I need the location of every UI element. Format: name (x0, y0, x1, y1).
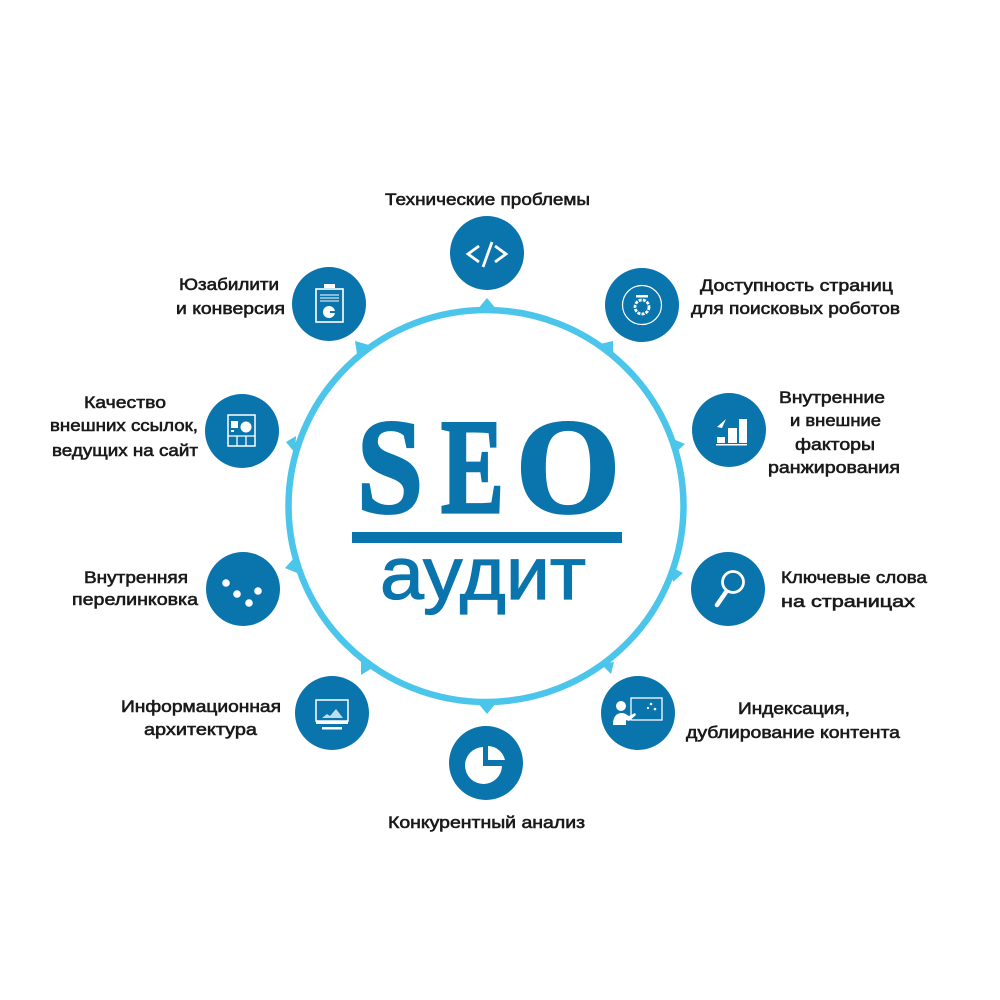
label: indexing: Индексация, (738, 699, 850, 718)
label: ranking factors: ранжирования (768, 458, 900, 477)
title divider bar (352, 532, 622, 543)
label: page accessibility: Доступность страниц (700, 276, 893, 295)
central title: SEO (357, 393, 620, 542)
node: usability and conversion (292, 267, 366, 341)
label: information architecture: архитектура (144, 720, 258, 739)
icon: code brackets (468, 242, 506, 267)
icon: dashboard grid (228, 415, 255, 446)
central title: SEO: E (441, 393, 504, 542)
central subtitle: аудит: аудит (380, 532, 586, 615)
label: internal linking (72, 568, 199, 609)
label: keywords: на страницах (781, 592, 916, 611)
node: internal linking (206, 552, 280, 626)
label: competitor analysis: Конкурентный анализ (388, 813, 585, 832)
icon: pie chart (465, 746, 505, 784)
label: backlink quality: Качество (84, 393, 166, 412)
node: ranking factors (692, 393, 766, 467)
node: keywords (691, 552, 765, 626)
node: page accessibility (605, 268, 679, 342)
icon: clipboard with chart (316, 284, 343, 322)
icon: monitor (316, 700, 348, 730)
node: technical problems (450, 216, 524, 290)
label: usability and conversion: и конверсия (176, 299, 285, 318)
label: page accessibility (691, 276, 900, 318)
node: backlink quality (205, 394, 279, 468)
label: ranking factors (768, 388, 900, 477)
label: keywords: Ключевые слова (781, 568, 928, 587)
icon: bar chart (716, 419, 747, 446)
label: information architecture (121, 697, 281, 739)
node: competitor analysis (449, 726, 523, 800)
central title: SEO: O (516, 393, 620, 542)
label: information architecture: Информационная (121, 697, 281, 716)
icon: gear in circle (622, 286, 662, 324)
icon: presenter at board (613, 698, 662, 725)
node: information architecture (295, 676, 369, 750)
label: technical problems: Технические проблемы (385, 190, 590, 209)
icon: linked dots (222, 579, 262, 607)
label: keywords (781, 568, 928, 611)
label: backlink quality: ведущих на сайт (52, 441, 198, 460)
label: usability and conversion: Юзабилити (179, 275, 279, 294)
node: indexing (601, 676, 675, 750)
label: internal linking: перелинковка (72, 590, 199, 609)
label: internal linking: Внутренняя (84, 568, 188, 587)
label: backlink quality (50, 393, 198, 460)
label: ranking factors: Внутренние (779, 388, 885, 407)
label: indexing (686, 699, 901, 742)
icon: magnifier (717, 572, 744, 605)
label: page accessibility: для поисковых роботов (691, 299, 900, 318)
label: ranking factors: факторы (795, 435, 875, 454)
label: backlink quality: внешних ссылок, (50, 416, 198, 435)
ring with arrowheads (285, 298, 685, 714)
label: indexing: дублирование контента (686, 723, 901, 742)
central title: SEO: S (357, 393, 423, 542)
label: usability and conversion (176, 275, 285, 318)
label: ranking factors: и внешние (790, 411, 881, 430)
